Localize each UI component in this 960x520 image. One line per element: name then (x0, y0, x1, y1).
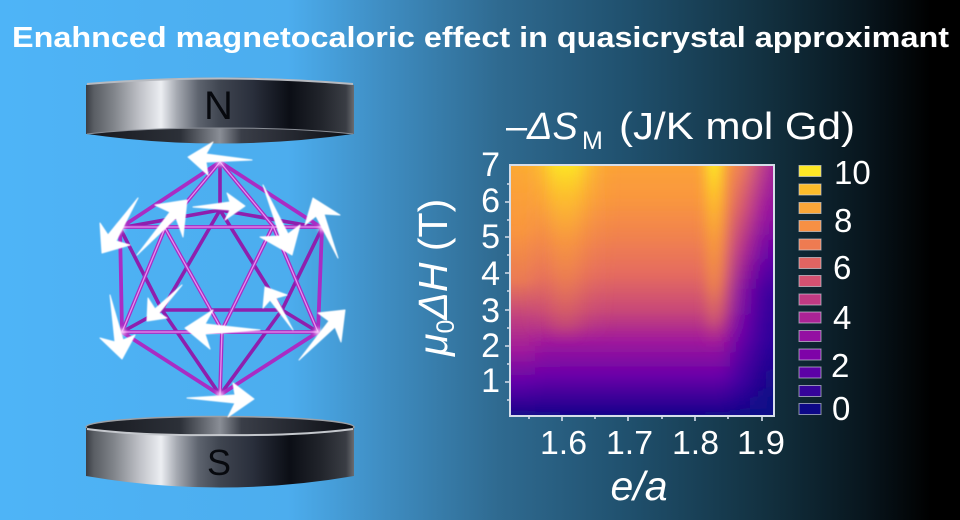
y axis title: ΔH (410, 262, 456, 321)
x tick labels: 1.9 (737, 424, 785, 461)
y tick labels (481, 146, 500, 400)
legend labels: 4 (833, 299, 851, 336)
y tick labels: 6 (481, 182, 500, 220)
y axis title: (T) (410, 199, 456, 251)
plot frame (510, 165, 774, 416)
title: Enahnced magnetocaloric effect in quasicrystal approximant (12, 22, 949, 54)
y tick labels: 7 (481, 146, 500, 184)
legend labels: 2 (831, 347, 849, 384)
x tick labels: 1.7 (606, 424, 653, 461)
x tick labels (540, 424, 785, 461)
y axis title: μ (410, 334, 456, 357)
legend labels (831, 154, 871, 427)
chart title: (J/K mol Gd) (619, 106, 855, 148)
x tick labels: 1.6 (540, 424, 587, 461)
legend labels: 0 (832, 390, 850, 427)
vertex glows (118, 160, 326, 398)
magnet: north pole (86, 78, 354, 144)
legend labels: 10 (834, 154, 871, 191)
y axis title: 0 (432, 320, 460, 334)
y tick labels: 4 (481, 255, 500, 293)
x axis title: e/a (610, 463, 668, 509)
axis ticks (505, 184, 762, 421)
chart title (506, 106, 855, 155)
y tick labels: 2 (481, 327, 500, 365)
heatmap chart (482, 152, 784, 454)
magnet: south pole (86, 416, 354, 488)
legend labels: 6 (833, 249, 851, 286)
legend labels: 8 (834, 202, 852, 239)
base field extended past the plot so vertical blur keeps the edges solid (511, 166, 773, 415)
y tick labels: 3 (481, 292, 500, 330)
broad peak near e/a 1.6 (545, 150, 587, 416)
chart title: M (582, 127, 603, 155)
label S: S (207, 442, 231, 483)
y tick labels: 1 (481, 362, 500, 400)
x tick labels: 1.8 (672, 424, 719, 461)
chart title: – (506, 106, 528, 148)
icosahedron wireframe (118, 160, 326, 398)
chart title: ΔS (526, 106, 578, 148)
narrow peak near e/a 1.83 (706, 150, 722, 416)
spin arrows (100, 142, 345, 417)
y tick labels: 5 (481, 218, 500, 256)
label N: N (204, 84, 233, 128)
colour legend (799, 154, 871, 427)
